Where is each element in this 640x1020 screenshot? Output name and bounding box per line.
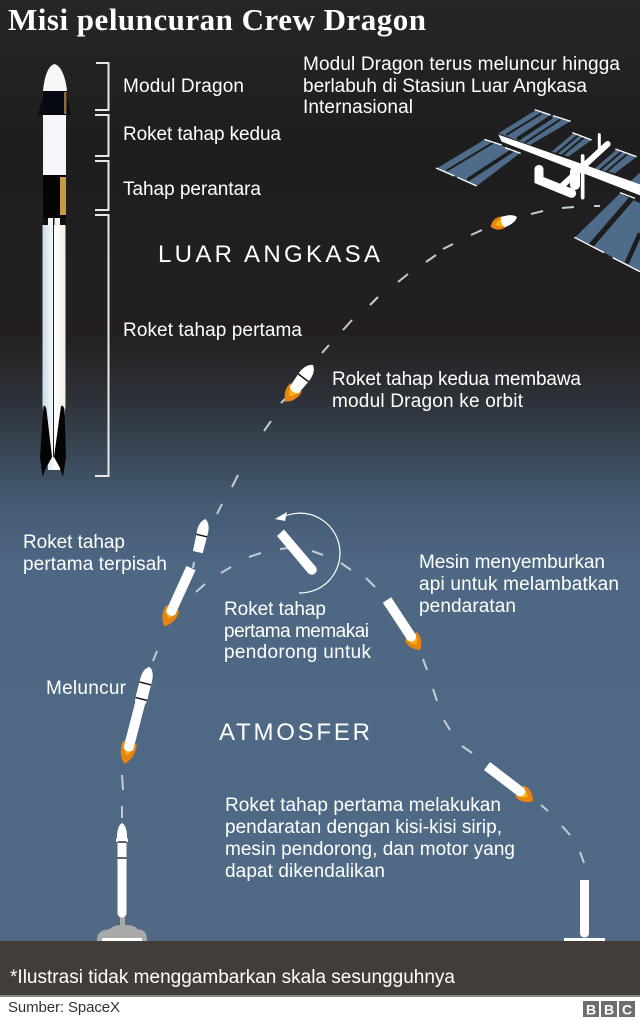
rocket body bbox=[116, 823, 128, 918]
text: engine burn: api untuk melambatkan bbox=[419, 574, 619, 595]
icon: landing burn rocket bbox=[482, 760, 538, 807]
icon: descending rocket bbox=[381, 596, 426, 654]
rocket first stage body bbox=[42, 225, 66, 470]
text: first stage separated: pertama terpisah bbox=[23, 554, 167, 575]
space station bbox=[436, 110, 640, 272]
text: landing description bbox=[225, 795, 515, 882]
text: second stage to orbit: modul Dragon ke orbit bbox=[332, 391, 524, 412]
text: docking description: Internasional bbox=[303, 97, 413, 118]
rocket trunk bbox=[38, 91, 71, 115]
text: first stage separated: Roket tahap bbox=[23, 532, 125, 553]
solar panels bbox=[437, 111, 640, 272]
title: Misi peluncuran Crew Dragon bbox=[8, 2, 426, 37]
icon: flip manoeuvre rocket bbox=[277, 530, 317, 575]
label: Modul Dragon: Modul Dragon bbox=[123, 76, 244, 97]
icon: Dragon capsule near station bbox=[489, 211, 519, 232]
text: landing description: mesin pendorong, dan motor yang bbox=[225, 839, 515, 860]
text: boost back bbox=[224, 599, 372, 663]
icon: rocket lifting off bbox=[117, 665, 157, 766]
label: Roket tahap kedua: Roket tahap kedua bbox=[123, 124, 281, 145]
footer bbox=[0, 995, 640, 1020]
rocket capsule bbox=[43, 64, 67, 91]
rocket centre seam bbox=[53, 225, 54, 457]
text: second stage to orbit: Roket tahap kedua membawa bbox=[332, 369, 581, 390]
text: landing description: dapat dikendalikan bbox=[225, 861, 385, 882]
rocket second stage bbox=[43, 115, 66, 175]
panel edges bbox=[436, 110, 640, 272]
icon: separated upper stage bbox=[192, 518, 211, 553]
rocket trunk highlight bbox=[64, 92, 66, 114]
detailed Falcon 9 rocket bbox=[38, 64, 71, 477]
text: second stage to orbit bbox=[332, 369, 581, 412]
source: Sumber: SpaceX bbox=[8, 999, 120, 1016]
rocket interstage bbox=[43, 175, 66, 225]
label: Roket tahap pertama: Roket tahap pertama bbox=[123, 320, 302, 341]
heading: atmosphere: ATMOSFER bbox=[219, 719, 370, 746]
text: first stage separated bbox=[23, 532, 167, 575]
text: landing description: pendaratan dengan kisi-kisi sirip, bbox=[225, 817, 502, 838]
footer rule bbox=[0, 995, 640, 997]
text: docking description: Modul Dragon terus meluncur hingga bbox=[303, 54, 620, 75]
panel stripes bbox=[447, 113, 640, 263]
label: liftoff: Meluncur bbox=[46, 678, 127, 699]
icon: separated first stage with flame bbox=[158, 565, 198, 629]
BBC logo: C bbox=[622, 1002, 632, 1018]
text: boost back: pendorong untuk bbox=[224, 642, 372, 663]
BBC logo bbox=[583, 1001, 635, 1018]
BBC logo: B bbox=[604, 1002, 614, 1018]
text: docking description bbox=[303, 54, 620, 118]
text: boost back: pertama memakai bbox=[224, 621, 369, 642]
text: engine burn: pendaratan bbox=[419, 596, 516, 617]
icon: second stage rocket bbox=[279, 361, 319, 406]
brackets bbox=[95, 63, 108, 476]
BBC logo: B bbox=[586, 1002, 596, 1018]
launch pad plate bbox=[102, 938, 142, 941]
heading: space: LUAR ANGKASA bbox=[158, 241, 380, 268]
text: engine burn bbox=[419, 552, 619, 617]
trajectory: ascent bbox=[122, 206, 600, 818]
label: Tahap perantara: Tahap perantara bbox=[123, 179, 261, 200]
text: landing description: Roket tahap pertama melakukan bbox=[225, 795, 501, 816]
footnote band bbox=[0, 941, 640, 995]
text: boost back: Roket tahap bbox=[224, 599, 326, 620]
rocket legs bbox=[40, 406, 66, 477]
rocket notches bbox=[48, 218, 60, 226]
arrow: rotation arc bbox=[275, 512, 340, 593]
icon: landed first stage bbox=[564, 880, 605, 941]
text: docking description: berlabuh di Stasiun Luar Angkasa bbox=[303, 76, 587, 97]
text: engine burn: Mesin menyemburkan bbox=[419, 552, 605, 573]
trajectory: first stage return bbox=[196, 548, 584, 863]
icon: rocket on launch pad bbox=[97, 823, 147, 941]
footnote: *Ilustrasi tidak menggambarkan skala sesungguhnya bbox=[10, 967, 455, 988]
launch pad smoke bbox=[97, 915, 147, 941]
truss and modules bbox=[498, 135, 640, 195]
